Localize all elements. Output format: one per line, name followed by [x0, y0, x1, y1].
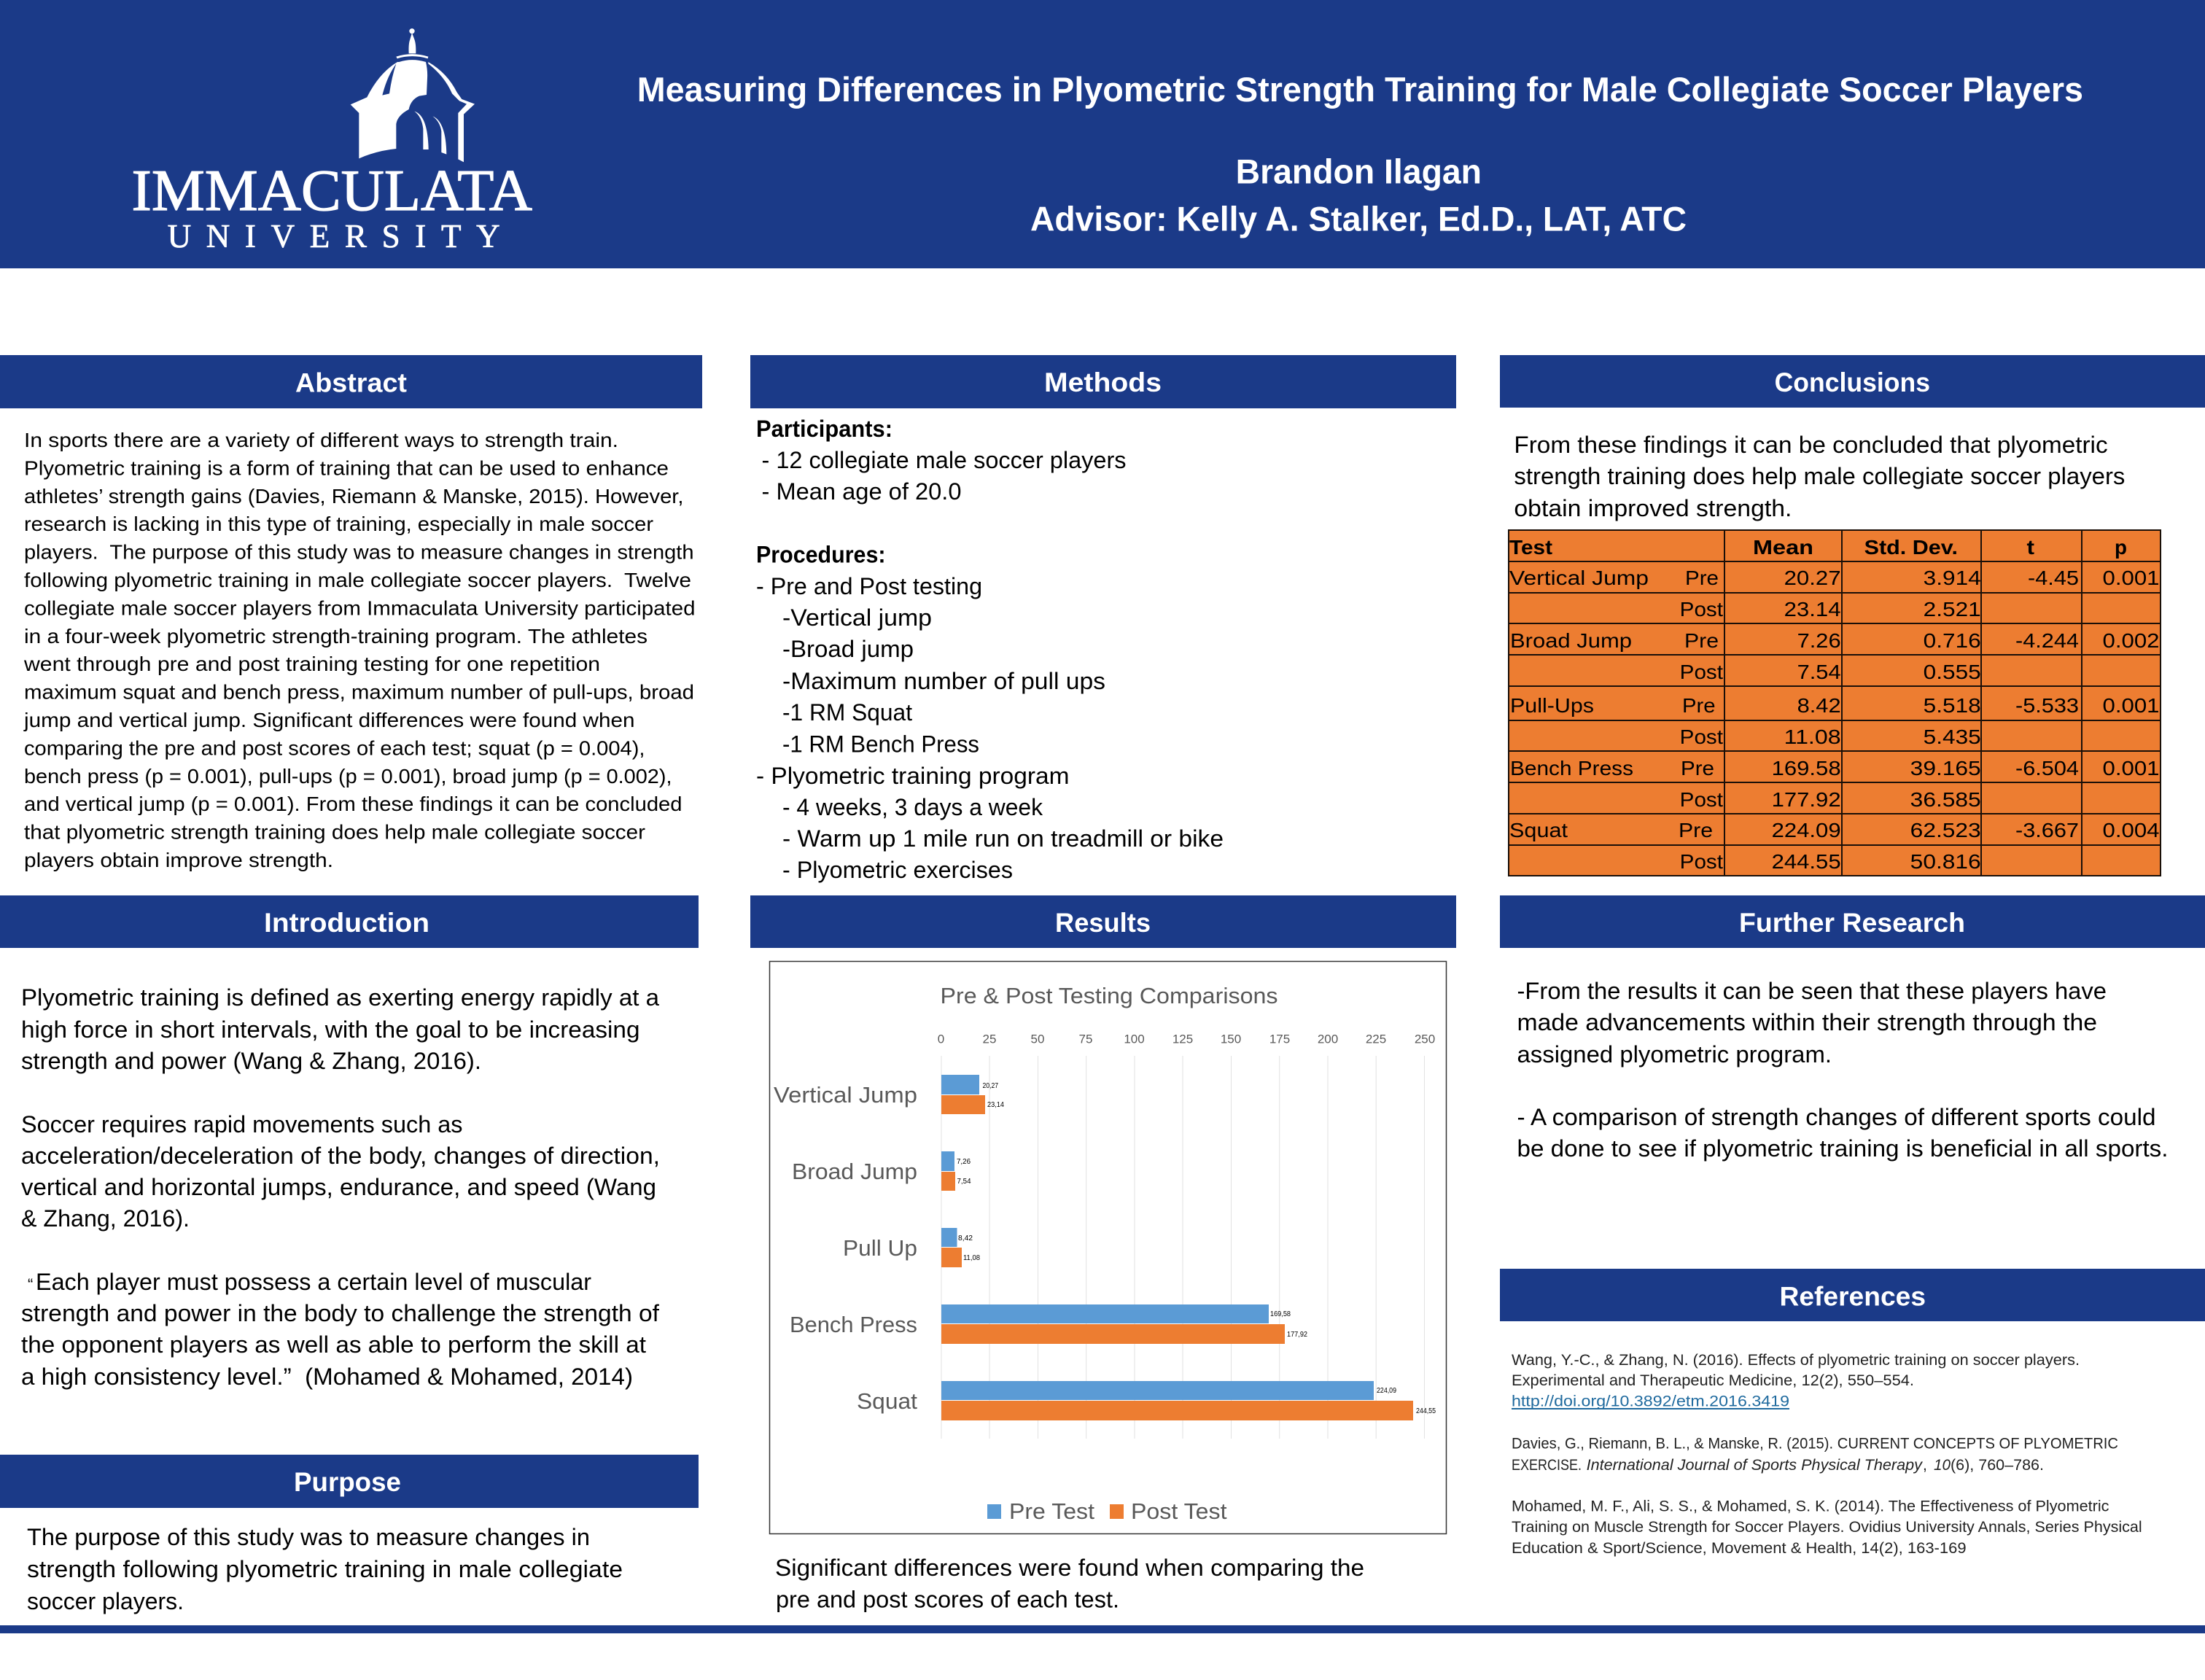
row: vertical jump: Post: [1680, 598, 1723, 621]
participants: - Mean age of 20.0: [761, 478, 961, 505]
row: squat: [1509, 819, 2160, 873]
abstract text: players. The purpose of this study was to measure changes in strength: [24, 541, 693, 564]
introduction text: Each player must possess a certain level of muscular: [36, 1269, 591, 1295]
conclusions text: strength training does help male collegiate soccer players: [1514, 463, 2125, 489]
panel: purpose: [0, 1455, 699, 1614]
heading: further research: Further Research: [1739, 908, 1965, 938]
introduction text: & Zhang, 2016).: [21, 1205, 190, 1232]
row: broad jump: 7.26: [1797, 629, 1841, 652]
data labels: 177,92: [1287, 1331, 1307, 1339]
abstract text: collegiate male soccer players from Immaculata University participated: [24, 596, 696, 619]
abstract text: and vertical jump (p = 0.001). From these findings it can be concluded: [24, 793, 682, 815]
row: vertical jump: 23.14: [1784, 598, 1841, 621]
author: Brandon Ilagan: [1236, 152, 1482, 191]
logo: Immaculata University: IMMACULATA: [131, 159, 532, 223]
introduction text: [21, 984, 660, 1390]
data labels: 23,14: [987, 1101, 1004, 1109]
reference: Davies et al: (6), 760–786.: [1951, 1457, 2044, 1474]
x axis and grid: 25: [983, 1032, 996, 1046]
row: squat: Squat: [1509, 819, 1568, 841]
introduction text: “: [28, 1275, 33, 1294]
category labels: Pull Up: [843, 1235, 917, 1261]
table header row: p: [2115, 536, 2127, 559]
x axis and grid: 250: [1415, 1032, 1435, 1046]
abstract text: In sports there are a variety of different ways to strength train.: [24, 429, 618, 451]
introduction text: a high consistency level.” (Mohamed & Mohamed, 2014): [21, 1364, 633, 1390]
introduction text: strength and power in the body to challenge the strength of: [21, 1300, 659, 1326]
legend: Pre Test: [1009, 1498, 1094, 1524]
bar chart: pre and post testing comparisons: [770, 961, 1447, 1534]
row: vertical jump: Pre: [1685, 567, 1719, 589]
procedures: -1 RM Squat: [782, 699, 912, 726]
row: squat: Pre: [1679, 819, 1713, 841]
abstract text: in a four-week plyometric strength-training program. The athletes: [24, 625, 648, 648]
reference: Davies et al: 10: [1934, 1457, 1951, 1474]
procedures: - Plyometric training program: [756, 763, 1069, 789]
row: bench press: Bench Press: [1510, 757, 1633, 779]
reference: Mohamed et al: Training on Muscle Strength for Soccer Players. Ovidius University Annals, Series Physical: [1512, 1519, 2142, 1536]
procedures: - Pre and Post testing: [756, 573, 982, 599]
row: pull-ups: 11.08: [1784, 726, 1841, 748]
reference: Wang and Zhang: Experimental and Therapeutic Medicine, 12(2), 550–554.: [1512, 1372, 1914, 1389]
further research text: assigned plyometric program.: [1517, 1041, 1832, 1068]
results table: [1509, 530, 2161, 876]
row: bench press: 0.001: [2103, 757, 2160, 779]
icon: dome: [351, 28, 475, 162]
procedures: - Warm up 1 mile run on treadmill or bike: [782, 825, 1224, 852]
row: broad jump: 0.555: [1924, 661, 1981, 683]
table header row: Mean: [1753, 536, 1813, 559]
x axis and grid: 0: [938, 1032, 944, 1046]
heading: results: Results: [1055, 908, 1151, 938]
heading: conclusions: Conclusions: [1775, 368, 1930, 397]
results caption: pre and post scores of each test.: [776, 1587, 1119, 1613]
introduction text: acceleration/deceleration of the body, changes of direction,: [21, 1143, 660, 1169]
reference: Davies et al: ,: [1923, 1457, 1927, 1474]
panel: methods: [750, 355, 1456, 883]
table header row: Test: [1509, 536, 1552, 559]
panel: conclusions: [1500, 355, 2205, 876]
reference: Davies et al: International Journal of Sports Physical Therapy: [1587, 1457, 1924, 1474]
abstract text: athletes’ strength gains (Davies, Riemann & Manske, 2015). However,: [24, 485, 684, 508]
further research text: made advancements within their strength through the: [1517, 1009, 2097, 1035]
abstract text: players obtain improve strength.: [24, 849, 333, 871]
category labels: Bench Press: [790, 1312, 917, 1337]
row: squat: Post: [1680, 850, 1723, 873]
abstract text: maximum squat and bench press, maximum number of pull-ups, broad: [24, 681, 694, 704]
table header row: Std. Dev.: [1864, 536, 1958, 559]
introduction text: high force in short intervals, with the goal to be increasing: [21, 1016, 639, 1043]
abstract text: [23, 429, 696, 871]
introduction text: vertical and horizontal jumps, endurance, and speed (Wang: [21, 1174, 656, 1200]
row: pull-ups: Pull-Ups: [1510, 694, 1594, 717]
data labels: 8,42: [958, 1234, 973, 1242]
row: pull-ups: Pre: [1682, 694, 1716, 717]
heading: purpose: Purpose: [294, 1467, 401, 1497]
row: broad jump: Broad Jump: [1510, 629, 1632, 652]
reference: Wang and Zhang: [1512, 1352, 2080, 1410]
heading: abstract: Abstract: [295, 368, 407, 398]
x axis and grid: 175: [1269, 1032, 1290, 1046]
introduction text: Soccer requires rapid movements such as: [21, 1111, 462, 1138]
purpose text: soccer players.: [27, 1588, 184, 1614]
x axis and grid: 125: [1172, 1032, 1193, 1046]
table header row: t: [2027, 536, 2034, 559]
abstract text: went through pre and post training testing for one repetition: [23, 653, 600, 675]
legend: Post Test: [1131, 1498, 1227, 1524]
x axis and grid: 200: [1318, 1032, 1338, 1046]
row: bench press: Post: [1680, 788, 1723, 811]
results caption: [775, 1555, 1364, 1613]
reference: Davies et al: Davies, G., Riemann, B. L., & Manske, R. (2015). CURRENT CONCEPTS OF PLYOMETRIC: [1512, 1436, 2118, 1452]
heading: abstract: [0, 355, 702, 408]
results caption: Significant differences were found when comparing the: [775, 1555, 1364, 1581]
further research text: [1517, 978, 2169, 1162]
panel: further research: [1500, 895, 2205, 1162]
abstract text: that plyometric strength training does help male collegiate soccer: [24, 821, 645, 844]
row: broad jump: [1510, 629, 2160, 683]
conclusions text: obtain improved strength.: [1514, 495, 1792, 521]
reference: Davies et al: [1512, 1436, 2118, 1474]
row: vertical jump: Vertical Jump: [1509, 567, 1649, 589]
row: vertical jump: [1509, 567, 2160, 621]
reference: Mohamed et al: Education & Sport/Science, Movement & Health, 14(2), 163-169: [1512, 1540, 1967, 1557]
panel: results: [750, 895, 1456, 1613]
category labels: Broad Jump: [792, 1159, 917, 1184]
purpose text: strength following plyometric training in male collegiate: [27, 1556, 623, 1582]
introduction text: Plyometric training is defined as exerting energy rapidly at a: [21, 984, 659, 1011]
abstract text: jump and vertical jump. Significant differences were found when: [23, 709, 635, 731]
introduction text: strength and power (Wang & Zhang, 2016).: [21, 1048, 481, 1074]
conclusions text: From these findings it can be concluded that plyometric: [1514, 432, 2108, 458]
procedures: -Vertical jump: [782, 604, 932, 631]
reference: Wang and Zhang: Wang, Y.-C., & Zhang, N. (2016). Effects of plyometric training on soccer players.: [1512, 1352, 2080, 1369]
further research text: - A comparison of strength changes of different sports could: [1517, 1104, 2155, 1130]
reference: Mohamed et al: Mohamed, M. F., Ali, S. S., & Mohamed, S. K. (2014). The Effectiveness of Plyometric: [1512, 1498, 2109, 1515]
header banner: [0, 0, 2205, 268]
heading: further research: [1500, 895, 2205, 948]
participants: - 12 collegiate male soccer players: [761, 447, 1126, 473]
reference: Mohamed et al: [1512, 1498, 2142, 1557]
heading: conclusions: [1500, 355, 2205, 408]
logo: Immaculata University: UNIVERSITY: [168, 218, 500, 254]
reference: Wang and Zhang: http://doi.org/10.3892/etm.2016.3419: [1512, 1393, 1789, 1410]
procedures: - 4 weeks, 3 days a week: [782, 794, 1043, 820]
heading: references: [1500, 1269, 2205, 1321]
table header row: [1509, 536, 2127, 559]
heading: references: References: [1779, 1282, 1926, 1311]
data labels: [957, 1082, 1436, 1415]
row: squat: 244.55: [1772, 850, 1841, 873]
logo: Immaculata University: [131, 28, 532, 254]
heading: introduction: Introduction: [264, 908, 429, 938]
row: pull-ups: Post: [1680, 726, 1723, 748]
row: vertical jump: 3.914: [1924, 567, 1981, 589]
data labels: 224,09: [1377, 1387, 1396, 1395]
data labels: 11,08: [963, 1254, 980, 1262]
row: pull-ups: 8.42: [1797, 694, 1841, 717]
abstract text: Plyometric training is a form of training that can be used to enhance: [24, 456, 669, 479]
panel: introduction: [0, 895, 699, 1390]
row: pull-ups: 0.001: [2103, 694, 2160, 717]
participants: [756, 416, 1126, 505]
x axis and grid: 50: [1031, 1032, 1044, 1046]
panel: abstract: [0, 355, 702, 871]
procedures: Procedures:: [756, 541, 885, 567]
x axis and grid: 150: [1221, 1032, 1241, 1046]
bars: post test: [941, 1095, 1413, 1420]
x axis and grid: 100: [1124, 1032, 1145, 1046]
participants: Participants:: [756, 416, 892, 442]
advisor: Advisor: Kelly A. Stalker, Ed.D., LAT, ATC: [1030, 200, 1687, 238]
x axis and grid: 225: [1366, 1032, 1386, 1046]
introduction text: the opponent players as well as able to perform the skill at: [21, 1331, 646, 1358]
abstract text: following plyometric training in male collegiate soccer players. Twelve: [24, 569, 691, 591]
heading: methods: [750, 355, 1456, 408]
row: broad jump: 0.002: [2103, 629, 2160, 652]
chart title: Pre & Post Testing Comparisons: [941, 983, 1278, 1008]
further research text: -From the results it can be seen that these players have: [1517, 978, 2107, 1004]
poster title: Measuring Differences in Plyometric Strength Training for Male Collegiate Soccer Players: [637, 70, 2083, 109]
data labels: 244,55: [1416, 1407, 1436, 1415]
row: squat: 62.523: [1910, 819, 1981, 841]
category labels: [774, 1082, 917, 1414]
reference: Davies et al: EXERCISE.: [1512, 1457, 1582, 1474]
heading: methods: Methods: [1044, 368, 1162, 397]
data labels: 169,58: [1270, 1310, 1291, 1318]
category labels: Squat: [857, 1388, 917, 1414]
heading: results: [750, 895, 1456, 948]
row: bench press: -6.504: [2015, 757, 2079, 779]
row: vertical jump: 2.521: [1924, 598, 1981, 621]
abstract text: research is lacking in this type of training, especially in male soccer: [24, 513, 653, 535]
row: vertical jump: -4.45: [2028, 567, 2079, 589]
row: bench press: 39.165: [1910, 757, 1981, 779]
row: broad jump: 0.716: [1924, 629, 1981, 652]
abstract text: bench press (p = 0.001), pull-ups (p = 0.001), broad jump (p = 0.002),: [24, 765, 672, 788]
purpose text: The purpose of this study was to measure changes in: [27, 1524, 590, 1550]
procedures: -Maximum number of pull ups: [782, 668, 1105, 694]
heading: introduction: [0, 895, 699, 948]
row: squat: 0.004: [2103, 819, 2160, 841]
row: squat: 224.09: [1772, 819, 1841, 841]
data labels: 7,54: [957, 1178, 971, 1186]
row: broad jump: -4.244: [2015, 629, 2079, 652]
row: pull-ups: [1510, 694, 2160, 748]
row: bench press: 177.92: [1772, 788, 1841, 811]
purpose text: [27, 1524, 623, 1614]
row: squat: -3.667: [2015, 819, 2079, 841]
legend: [987, 1498, 1227, 1524]
row: pull-ups: -5.533: [2015, 694, 2079, 717]
data labels: 7,26: [957, 1158, 971, 1166]
procedures: - Plyometric exercises: [782, 857, 1013, 883]
bars: pre test: [941, 1075, 1374, 1400]
row: pull-ups: 5.518: [1924, 694, 1981, 717]
further research text: be done to see if plyometric training is beneficial in all sports.: [1517, 1135, 2169, 1162]
row: bench press: [1510, 757, 2160, 811]
row: vertical jump: 0.001: [2103, 567, 2160, 589]
row: broad jump: Post: [1680, 661, 1723, 683]
conclusions text: [1514, 432, 2125, 521]
x axis and grid: [938, 1032, 1435, 1439]
row: bench press: 36.585: [1910, 788, 1981, 811]
procedures: -1 RM Bench Press: [782, 731, 979, 757]
row: broad jump: Pre: [1684, 629, 1719, 652]
abstract text: comparing the pre and post scores of each test; squat (p = 0.004),: [24, 736, 645, 759]
panel: references: [1500, 1269, 2205, 1557]
procedures: [756, 541, 1224, 883]
data labels: 20,27: [983, 1082, 998, 1090]
row: vertical jump: 20.27: [1784, 567, 1841, 589]
heading: purpose: [0, 1455, 699, 1508]
row: bench press: 169.58: [1772, 757, 1841, 779]
category labels: Vertical Jump: [774, 1082, 917, 1108]
row: squat: 50.816: [1910, 850, 1981, 873]
row: broad jump: 7.54: [1797, 661, 1841, 683]
procedures: -Broad jump: [782, 636, 914, 662]
row: pull-ups: 5.435: [1924, 726, 1981, 748]
row: bench press: Pre: [1681, 757, 1714, 779]
x axis and grid: 75: [1079, 1032, 1092, 1046]
